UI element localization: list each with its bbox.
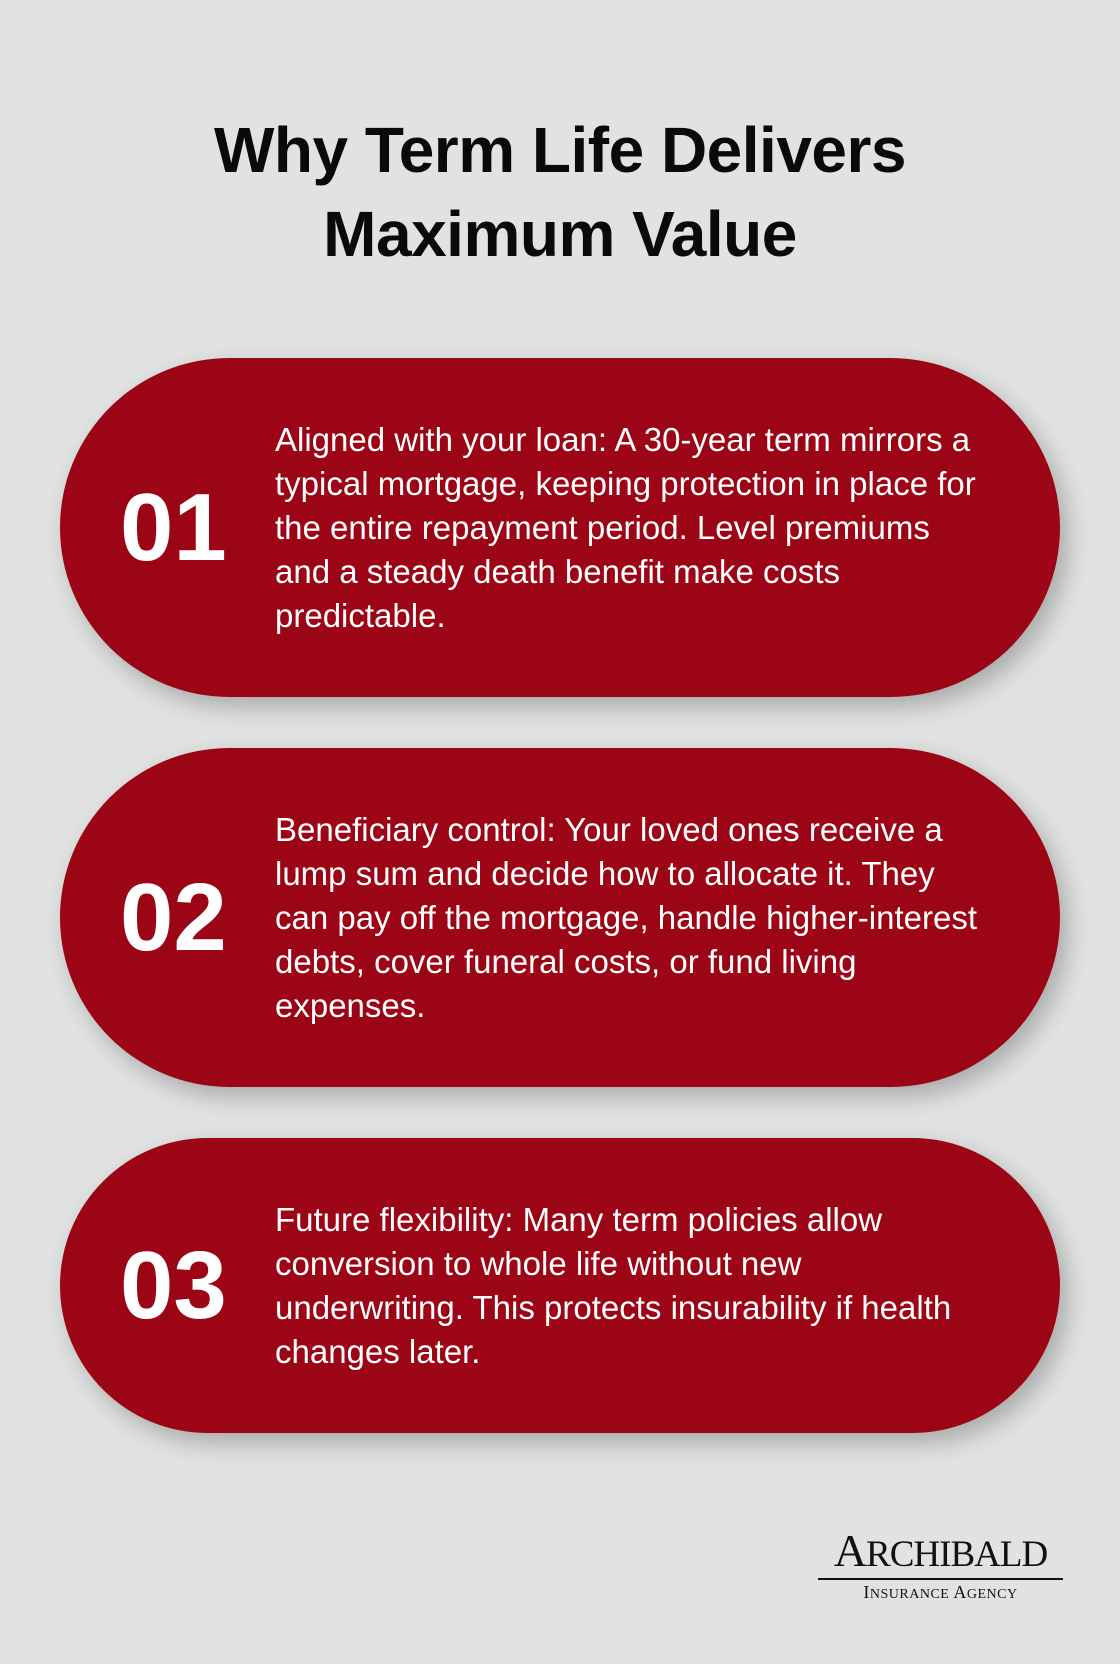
- text 01: and a steady death benefit make costs: [275, 552, 840, 590]
- number 03: 03: [120, 1232, 227, 1338]
- text 01: Aligned with your loan: A 30-year term mirrors a: [275, 420, 970, 458]
- text 02: can pay off the mortgage, handle higher-interest: [275, 898, 977, 936]
- panel: item 01: [60, 358, 1060, 697]
- text 01: predictable.: [275, 596, 446, 634]
- text 01: typical mortgage, keeping protection in place for: [275, 464, 976, 502]
- logo: [818, 1525, 1063, 1602]
- panel: item 02: [60, 748, 1060, 1087]
- text 03: changes later.: [275, 1332, 480, 1370]
- text 03: [275, 1200, 951, 1370]
- text 02: [275, 810, 977, 1024]
- text 02: Beneficiary control: Your loved ones receive a: [275, 810, 943, 848]
- text 02: expenses.: [275, 986, 425, 1024]
- text 02: lump sum and decide how to allocate it. They: [275, 854, 935, 892]
- text 02: debts, cover funeral costs, or fund living: [275, 942, 856, 980]
- text 01: the entire repayment period. Level premiums: [275, 508, 930, 546]
- logo: ARCHIBALD: [834, 1525, 1047, 1576]
- logo: INSURANCE AGENCY: [863, 1582, 1018, 1602]
- panel: item 03: [60, 1138, 1060, 1433]
- text 03: Future flexibility: Many term policies allow: [275, 1200, 882, 1238]
- title: Why Term Life Delivers: [214, 114, 906, 186]
- number 02: 02: [120, 864, 227, 970]
- text 03: conversion to whole life without new: [275, 1244, 801, 1282]
- title: [214, 114, 906, 270]
- text 03: underwriting. This protects insurability if health: [275, 1288, 951, 1326]
- title: Maximum Value: [323, 198, 797, 270]
- text 01: [275, 420, 976, 634]
- number 01: 01: [120, 474, 227, 580]
